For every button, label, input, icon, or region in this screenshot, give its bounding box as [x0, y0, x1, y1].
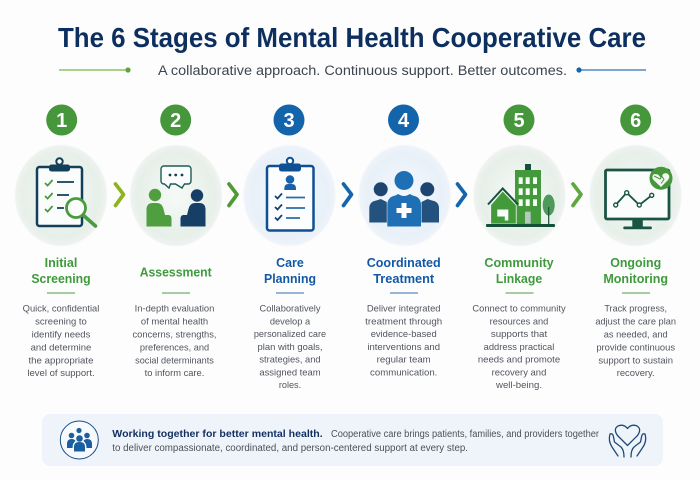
description: supports that	[491, 329, 548, 340]
heading: Initial	[45, 255, 77, 270]
heading: Screening	[31, 271, 91, 286]
stage 5: community linkage	[472, 104, 566, 391]
stage 1: initial screening	[14, 104, 108, 379]
description: recovery and	[492, 367, 546, 378]
heading: Care	[276, 255, 304, 270]
description: the appropriate	[28, 355, 94, 366]
description	[254, 304, 326, 391]
heading	[484, 255, 554, 286]
number badge 2: 2	[170, 110, 181, 132]
description: Connect to community	[472, 304, 566, 314]
banner text: to deliver compassionate, coordinated, and person-centered support at every step.	[112, 443, 468, 454]
description: plan with goals,	[258, 342, 322, 353]
number badge 3	[274, 104, 304, 136]
icon: house and buildings	[473, 144, 566, 246]
description	[595, 304, 676, 379]
icon: two people talking	[130, 144, 222, 246]
heading: Linkage	[496, 271, 542, 286]
description: screening to	[35, 317, 87, 328]
stage 6: ongoing monitoring	[589, 104, 682, 379]
description: well-being.	[495, 380, 542, 391]
description: recovery.	[617, 368, 655, 379]
description: evidence-based	[371, 329, 437, 340]
description: interventions and	[367, 342, 440, 353]
description: communication.	[370, 367, 437, 378]
heading: Monitoring	[603, 271, 668, 286]
description: In-depth evaluation	[135, 304, 214, 315]
number badge 2	[160, 104, 191, 136]
description	[365, 304, 442, 378]
icon: care team	[358, 144, 451, 246]
heading	[367, 255, 441, 286]
icon: group of people	[60, 421, 98, 459]
banner text: Cooperative care brings patients, families, and providers together	[331, 429, 600, 440]
heading	[31, 255, 91, 286]
description: treatment through	[365, 316, 442, 327]
description: Collaboratively	[260, 304, 321, 314]
description: needs and promote	[478, 355, 560, 366]
blue accent line	[576, 67, 646, 73]
stage 2: assessment	[130, 104, 222, 379]
description: of mental health	[141, 317, 208, 328]
heading: Assessment	[140, 265, 212, 280]
number badge 6: 6	[630, 110, 641, 132]
description: develop a	[270, 316, 311, 327]
number badge 4	[388, 104, 419, 136]
description: social determinants	[135, 355, 214, 366]
arrow 1	[116, 184, 124, 206]
arrow 5	[573, 184, 581, 206]
number badge 6	[620, 104, 651, 136]
description: assigned team	[259, 367, 321, 378]
description: Quick, confidential	[23, 304, 99, 315]
number badge 1	[46, 104, 77, 136]
green accent line	[59, 67, 131, 73]
number badge 3: 3	[283, 110, 295, 132]
description: Track progress,	[604, 304, 667, 315]
description: roles.	[279, 380, 301, 391]
description: address practical	[484, 342, 554, 353]
description: concerns, strengths,	[132, 330, 216, 340]
icon: clipboard with magnifier	[14, 144, 108, 246]
heading: Coordinated	[367, 255, 441, 270]
description: Deliver integrated	[367, 304, 441, 314]
description: support to sustain	[598, 355, 673, 366]
number badge 1: 1	[56, 110, 67, 132]
number badge 4: 4	[398, 110, 410, 132]
banner	[42, 414, 663, 466]
heading	[603, 255, 668, 286]
heading: Ongoing	[610, 255, 661, 270]
arrow 2	[229, 184, 237, 206]
number badge 5: 5	[513, 110, 525, 132]
icon: hands holding heart	[609, 425, 646, 457]
description	[23, 304, 99, 379]
description	[472, 304, 566, 391]
stage 3: care planning	[243, 104, 336, 391]
heading: Treatment	[373, 271, 435, 286]
stage 4: coordinated treatment	[358, 104, 451, 378]
arrow 3	[344, 184, 352, 206]
description: level of support.	[27, 368, 95, 379]
icon: care plan clipboard	[243, 144, 336, 246]
description: strategies, and	[259, 355, 321, 366]
description: resources and	[490, 316, 548, 327]
description: adjust the care plan	[595, 317, 676, 328]
header	[58, 22, 646, 78]
description: provide continuous	[596, 342, 675, 353]
heading	[264, 255, 316, 286]
banner text	[112, 428, 600, 454]
banner text: Working together for better mental health.	[112, 428, 323, 440]
description: to inform care.	[145, 368, 204, 379]
heading: Planning	[264, 271, 316, 286]
description: as needed, and	[604, 330, 668, 340]
description: preferences, and	[140, 342, 209, 353]
description: regular team	[377, 355, 431, 366]
description: and determine	[31, 342, 91, 353]
description: identify needs	[32, 330, 91, 340]
title: The 6 Stages of Mental Health Cooperative Care	[58, 22, 646, 53]
subtitle: A collaborative approach. Continuous support. Better outcomes.	[158, 63, 567, 78]
number badge 5	[504, 104, 534, 136]
arrow 4	[458, 184, 466, 206]
heading: Community	[484, 255, 554, 270]
icon: monitor with chart	[589, 144, 682, 246]
description	[132, 304, 216, 379]
description: personalized care	[254, 329, 326, 340]
